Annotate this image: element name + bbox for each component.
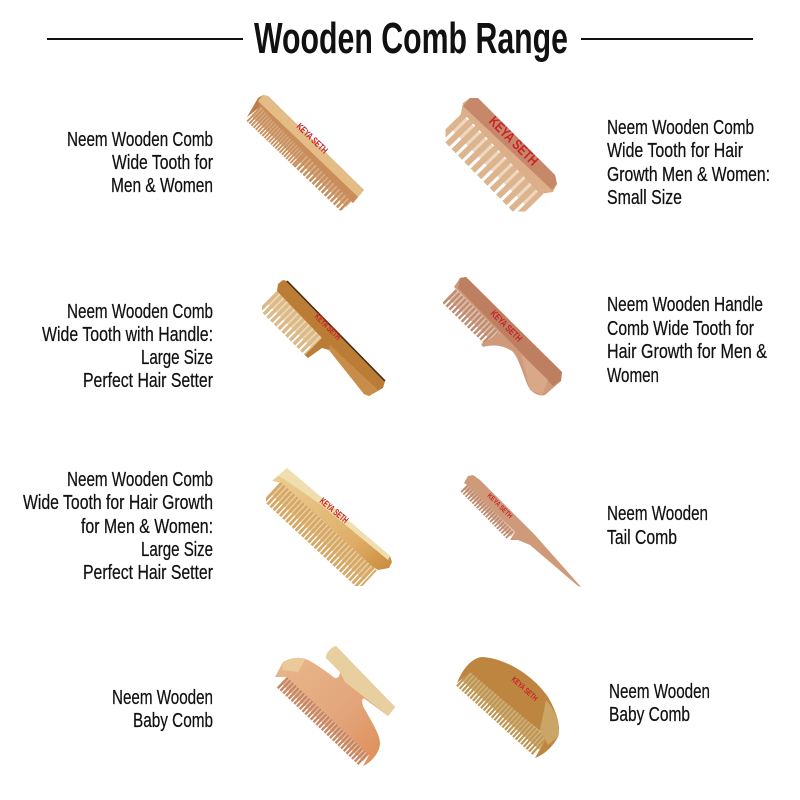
label: comb 2: Neem Wooden Comb <box>607 117 754 139</box>
label: comb 3 <box>42 301 213 392</box>
comb 5: hair growth large size: KEYA SETH <box>317 496 350 526</box>
label: comb 5: Neem Wooden Comb <box>67 469 213 491</box>
label: comb 4: Comb Wide Tooth for <box>607 318 754 340</box>
label: comb 8: Baby Comb <box>609 704 690 726</box>
label: comb 3: Neem Wooden Comb <box>67 301 213 323</box>
label: comb 5: for Men & Women: <box>81 516 213 538</box>
label: comb 6: Tail Comb <box>607 527 677 549</box>
comb 8: half-moon baby comb <box>457 657 559 758</box>
label: comb 8: Neem Wooden <box>609 681 710 703</box>
comb 1: neem wide tooth: KEYA SETH <box>294 121 330 156</box>
comb 4: handle comb <box>449 277 562 395</box>
comb 8: half-moon baby comb: KEYA SETH <box>510 675 540 703</box>
label: comb 7 <box>112 687 213 732</box>
label: comb 6: Neem Wooden <box>607 503 708 525</box>
label: comb 1 <box>67 129 213 197</box>
label: comb 5: Large Size <box>141 539 213 561</box>
label: comb 1: Neem Wooden Comb <box>67 129 213 151</box>
comb 6: tail comb: KEYA SETH <box>486 492 513 520</box>
comb 3: wide tooth with handle <box>268 280 385 396</box>
label: comb 7: Baby Comb <box>133 710 213 732</box>
label: comb 2: Wide Tooth for Hair <box>607 140 743 162</box>
label: comb 4: Hair Growth for Men & <box>607 341 768 363</box>
label: comb 8 <box>609 681 710 726</box>
label: comb 6 <box>607 503 708 549</box>
label: comb 3: Perfect Hair Setter <box>83 370 213 392</box>
comb 5: hair growth large size <box>272 468 392 580</box>
title with rules: Wooden Comb Range <box>254 14 568 63</box>
comb 6: tail comb <box>464 475 581 587</box>
label: comb 3: Large Size <box>141 347 213 369</box>
label: comb 4: Women <box>607 365 659 387</box>
comb 2: wide tooth small size <box>451 98 557 206</box>
label: comb 2: Small Size <box>607 187 682 209</box>
comb 4: handle comb: KEYA SETH <box>488 308 524 344</box>
comb 1: neem wide tooth <box>247 95 364 205</box>
label: comb 4 <box>607 294 768 387</box>
label: comb 5 <box>23 469 213 584</box>
label: comb 1: Men & Women <box>111 175 213 197</box>
comb 7: baby comb with cutouts <box>275 646 395 766</box>
label: comb 7: Neem Wooden <box>112 687 213 709</box>
label: comb 3: Wide Tooth with Handle: <box>42 324 213 346</box>
label: comb 1: Wide Tooth for <box>112 152 213 174</box>
label: comb 5: Wide Tooth for Hair Growth <box>23 492 213 514</box>
label: comb 2 <box>607 117 770 209</box>
comb 2: wide tooth small size: KEYA SETH <box>486 113 542 169</box>
comb 3: wide tooth with handle: KEYA SETH <box>312 311 343 343</box>
label: comb 5: Perfect Hair Setter <box>83 562 213 584</box>
